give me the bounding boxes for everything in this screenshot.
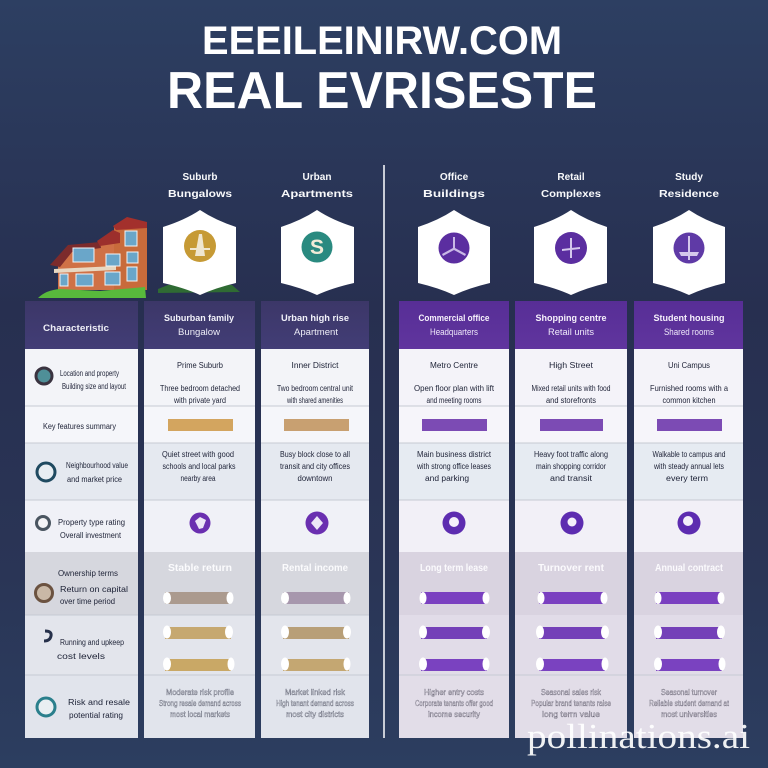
column 1 text: Prime Suburb [177,361,224,370]
column 4 text: main shopping corridor [536,462,606,471]
panel: column 5 study residence [634,301,743,738]
watermark: pollinations.ai [527,717,750,756]
column 5 text: Uni Campus [668,361,710,370]
column 2 bar caps [281,592,351,670]
column 1 text: Suburban family [164,313,235,324]
column 3 text: Corporate tenants offer good [415,699,493,708]
column 3 text: Headquarters [430,327,478,337]
column 1 text: most local markets [170,710,230,719]
column 4 text: High Street [549,361,594,370]
column 3 bars [422,419,487,431]
column 4 text: and storefronts [546,396,596,405]
column 5 text: Reliable student demand at [649,699,730,708]
column 2 text: Urban high rise [281,313,349,324]
column 3 text: and meeting rooms [426,396,482,405]
column 4 text: Heavy foot traffic along [534,450,608,459]
column labels: Bungalows [168,189,233,200]
column labels: Office [440,172,469,183]
column 5 text: Seasonal turnover [661,688,717,697]
row labels: cost levels [57,652,105,661]
column 3 text [414,313,495,719]
center divider [383,165,385,738]
title [167,19,597,120]
column 5 text: common kitchen [662,396,716,405]
column labels: Apartments [281,189,354,200]
column 4 text: Turnover rent [538,563,605,574]
column 5 text: Furnished rooms with a [650,384,729,393]
column labels [168,172,720,200]
column 1 rating icon [190,512,210,534]
column 3 rating icon [442,512,466,534]
row labels: Key features summary [43,422,116,431]
column 4 text: Popular brand tenants raise [531,699,611,708]
column 3 text: Long term lease [420,563,488,574]
column 2 text: transit and city offices [280,462,350,471]
panel: column 2 urban apartments [261,301,369,738]
row labels: Neighbourhood value [66,461,128,470]
row icons [36,368,55,716]
column 3 text: Higher entry costs [424,688,484,697]
row labels [43,323,131,720]
column 1 text: Strong resale demand across [159,699,241,708]
column 3 text: Open floor plan with lift [414,384,495,393]
row labels: Return on capital [60,585,128,594]
column 1 text [159,313,241,719]
column 1 text: with private yard [173,396,226,405]
column 5 text: Shared rooms [664,327,714,337]
hexagon badge 4 [534,210,607,295]
row labels: Building size and layout [62,382,127,391]
column 1 text: nearby area [180,474,216,483]
column 5 text: Annual contract [655,563,724,574]
column 3 text: and parking [425,474,469,483]
column 3 text: Metro Centre [430,361,479,370]
row labels: Risk and resale [68,698,131,707]
column labels: Buildings [423,189,486,200]
column 3 text: Main business district [417,450,492,459]
column 3 bar caps [419,592,490,670]
column 4 bar caps [536,592,609,670]
column 1 text: Three bedroom detached [160,384,240,393]
row labels: and market price [67,475,122,484]
column 2 text: Apartment [294,327,339,337]
column labels: Residence [659,189,720,200]
column 4 text: Mixed retail units with food [532,384,610,393]
column 3 text: with strong office leases [416,462,491,471]
column 3 text: Commercial office [418,313,490,324]
row labels: potential rating [69,711,123,720]
column 5 rating icon [678,512,700,534]
column 4 text: Retail units [548,327,595,337]
row labels: Location and property [60,369,119,378]
column 5 text: most universities [661,710,717,719]
panel: column 3 office buildings [399,301,509,738]
hexagon badge 2: S [310,236,324,259]
column 5 bar caps [654,592,726,670]
column 2 text: most city districts [286,710,344,719]
column labels: Suburb [182,172,218,183]
column 5 text [649,313,730,719]
column 2 text: Inner District [292,361,339,370]
column labels: Study [675,172,703,183]
hexagon badge 1 [163,210,236,295]
row labels: over time period [60,597,115,606]
column labels: Retail [557,172,585,183]
column 2 text [276,313,354,719]
column 1 text: Quiet street with good [162,450,234,459]
column 3 text: income security [428,710,480,719]
column 1 text: Bungalow [178,327,221,337]
column 2 text: High tenant demand across [276,699,354,708]
row labels: Ownership terms [58,569,118,578]
column 1 text: Stable return [168,563,232,574]
column 2 bars [284,419,349,431]
title: REAL EVRISESTE [167,62,597,120]
column 2 text: Busy block close to all [280,450,350,459]
row labels: Overall investment [60,531,122,540]
hexagon badge 2 [281,210,354,295]
column 5 text: with steady annual lets [653,462,724,471]
column labels: Complexes [541,189,601,200]
column 1 text: schools and local parks [162,462,236,471]
hexagon badge 3 [418,210,490,295]
column 5 text: every term [666,474,708,483]
column 2 text: Rental income [282,563,348,574]
column 4 bars [540,419,603,431]
column 1 bar caps [163,592,234,670]
column 5 text: Walkable to campus and [652,450,726,459]
column 4 text: and transit [550,474,593,483]
panel: column 1 suburb bungalows [144,301,255,738]
column 5 text: Student housing [654,313,725,324]
column 2 text: with shared amenities [286,396,343,405]
column 4 text: long term value [542,710,601,719]
column 2 rating icon [306,512,328,534]
column 4 rating icon [560,512,584,534]
column 1 bars [168,419,233,431]
column 2 text: Two bedroom central unit [277,384,354,393]
panel: feature label column [25,301,138,738]
panel: column 4 retail complexes [515,301,627,738]
row labels: Characteristic [43,323,109,333]
column 1 text: Moderate risk profile [166,688,235,697]
column 5 bars [657,419,722,431]
column 4 text: Shopping centre [536,313,606,324]
column 2 text: Market linked risk [285,688,346,697]
icon: house illustration [38,217,240,298]
hexagon badge 5 [653,210,725,295]
row labels: Property type rating [58,518,125,527]
column 4 text [531,313,611,719]
column 4 text: Seasonal sales risk [541,688,602,697]
column 2 text: downtown [298,474,332,483]
row labels: Running and upkeep [60,638,124,647]
column labels: Urban [303,172,331,183]
title: EEEILEINIRW.COM [202,19,562,63]
